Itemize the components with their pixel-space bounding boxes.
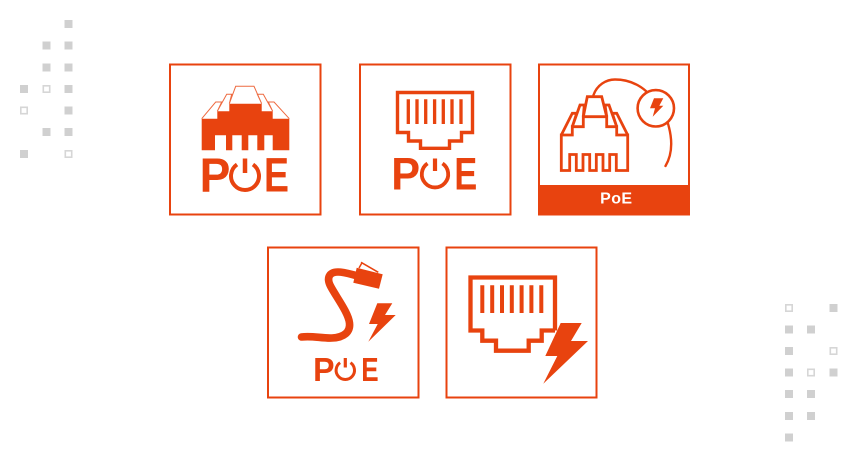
label: POE: [200, 148, 289, 203]
icon: patch cable: [302, 262, 383, 338]
icon: lightning bolt: [368, 303, 396, 342]
panel: PoE icon with banner: [539, 64, 690, 215]
icon: solid RJ45 connector: [202, 86, 289, 150]
banner label: PoE: PoE: [600, 190, 632, 208]
label: POE: E: [264, 149, 289, 203]
label: POE: [391, 150, 477, 200]
label: POE: E: [361, 352, 379, 389]
icon: connector outline: [561, 97, 628, 170]
label: POE: E: [454, 150, 477, 199]
banner: [540, 185, 690, 215]
panel: PoE icon with cable and bolt: [268, 248, 418, 398]
decorative dots: top left: [20, 20, 72, 158]
icon: ethernet port outline: [398, 92, 472, 148]
decorative dots: bottom right: [785, 304, 838, 442]
label: POE: [313, 350, 379, 389]
panel: PoE icon with solid connector: [170, 64, 320, 214]
label: POE: P: [391, 150, 420, 200]
icon: circled bolt: [638, 90, 674, 127]
label: POE: P: [313, 350, 334, 388]
label: POE: P: [200, 148, 230, 202]
panel: PoE icon with outlined port: [360, 64, 510, 214]
icon: cable: [594, 80, 671, 166]
icon: ethernet port outline: [470, 278, 555, 351]
icon: lightning bolt: [543, 323, 588, 384]
panel: port with bolt icon: [446, 248, 596, 398]
